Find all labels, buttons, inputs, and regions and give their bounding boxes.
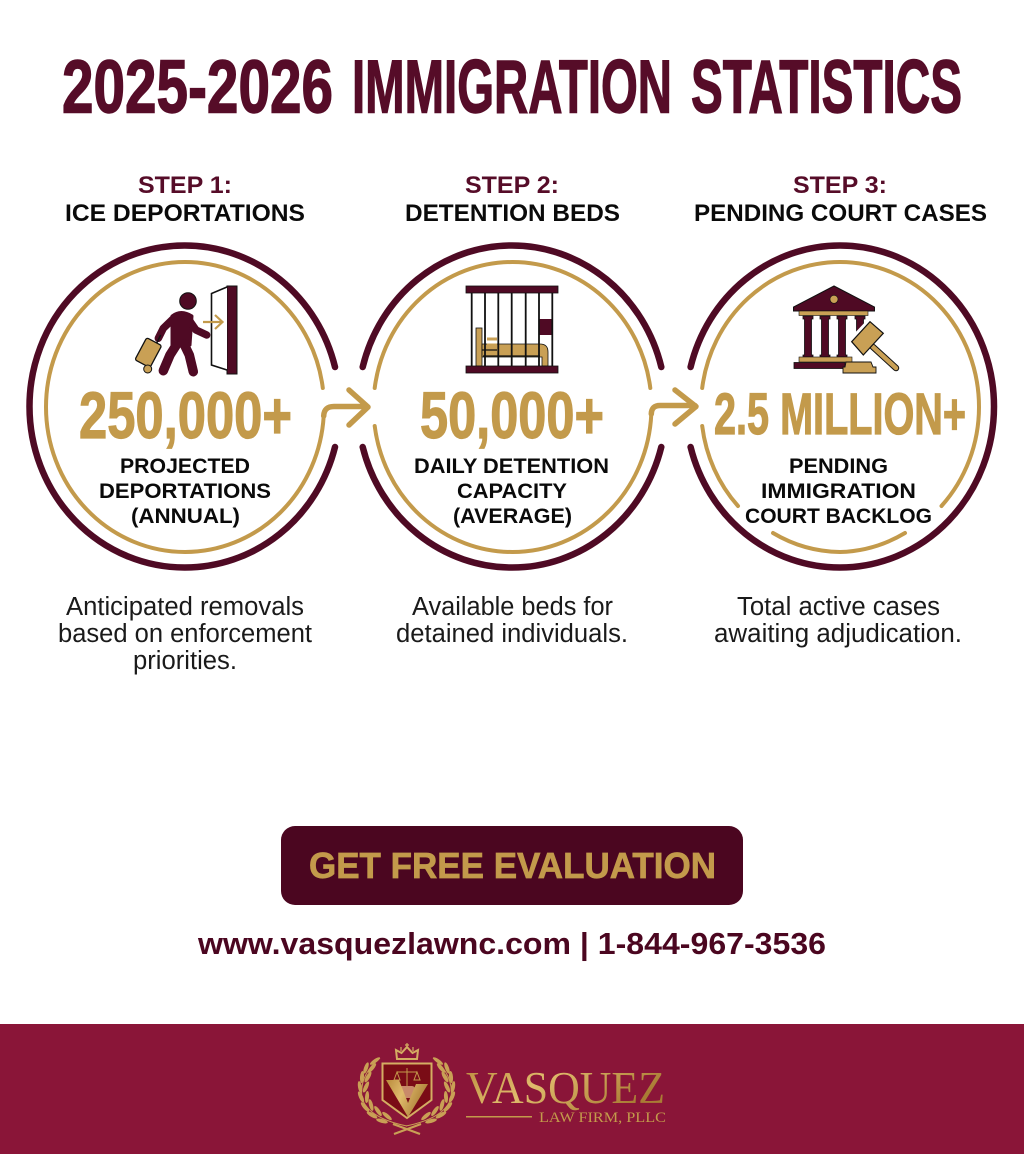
panel: circle 2 detention bbox=[363, 246, 661, 568]
label: pending immigration court backlog: PENDING bbox=[789, 455, 888, 478]
label: projected deportations: (ANNUAL) bbox=[131, 505, 240, 528]
footer band bbox=[0, 1024, 1024, 1154]
arrow: step 2 to step 3 bbox=[651, 390, 696, 424]
label: daily detention capacity: DAILY DETENTION bbox=[414, 455, 609, 478]
description: step 2 bbox=[396, 593, 628, 648]
description: step 1: priorities. bbox=[133, 647, 237, 675]
outer ring 3 bbox=[691, 245, 994, 568]
heading: step 3: STEP 3: bbox=[793, 172, 887, 199]
description: step 3: awaiting adjudication. bbox=[714, 620, 962, 648]
heading: step 3 bbox=[694, 172, 987, 227]
arrow: step 1 to step 2 bbox=[324, 390, 368, 425]
label: daily detention capacity: (AVERAGE) bbox=[453, 505, 572, 528]
button: get free evaluation: GET FREE EVALUATION bbox=[309, 845, 716, 886]
heading: step 2: STEP 2: bbox=[465, 172, 559, 199]
inner ring 3 bbox=[702, 262, 979, 552]
heading: step 1: STEP 1: bbox=[138, 172, 232, 199]
heading: step 2 bbox=[405, 172, 620, 227]
wreath left bbox=[357, 1056, 407, 1126]
icon: courthouse and gavel bbox=[794, 286, 896, 373]
description: step 3 bbox=[714, 593, 962, 648]
panel: circle 3 court backlog bbox=[691, 245, 994, 568]
title: 2025-2026 bbox=[62, 44, 333, 128]
description: step 2: detained individuals. bbox=[396, 620, 628, 648]
description: step 1: Anticipated removals bbox=[66, 593, 304, 621]
label: projected deportations: DEPORTATIONS bbox=[99, 480, 271, 503]
stat: 50,000+: 50,000+ bbox=[420, 378, 604, 452]
inner ring 1 bbox=[46, 262, 324, 552]
logo emblem bbox=[357, 1043, 456, 1134]
title bbox=[62, 44, 962, 128]
description: step 1: based on enforcement bbox=[58, 620, 312, 648]
wreath right bbox=[406, 1056, 456, 1126]
description: step 3: Total active cases bbox=[737, 593, 940, 621]
heading: step 1 bbox=[65, 172, 305, 227]
label: projected deportations bbox=[99, 455, 271, 528]
label: pending immigration court backlog: IMMIGRATION bbox=[761, 480, 916, 503]
description: step 2: Available beds for bbox=[412, 593, 613, 621]
icon: person leaving through door bbox=[135, 286, 237, 374]
logo subtitle: LAW FIRM, PLLC bbox=[539, 1110, 666, 1126]
heading: step 3: PENDING COURT CASES bbox=[694, 200, 987, 227]
button: get free evaluation bbox=[281, 826, 743, 905]
inner ring 2 bbox=[375, 262, 651, 552]
outer ring 1 bbox=[30, 245, 335, 568]
heading: step 1: ICE DEPORTATIONS bbox=[65, 200, 305, 227]
stat: 250,000+: 250,000+ bbox=[79, 378, 292, 452]
label: projected deportations: PROJECTED bbox=[120, 455, 250, 478]
description: step 1 bbox=[58, 593, 312, 675]
panel: circle 1 deportations bbox=[30, 245, 335, 568]
heading: step 2: DETENTION BEDS bbox=[405, 200, 620, 227]
contact line: www.vasquezlawnc.com | 1-844-967-3536 bbox=[197, 926, 826, 961]
outer ring 2 bbox=[363, 246, 661, 568]
label: daily detention capacity: CAPACITY bbox=[457, 480, 567, 503]
label: daily detention capacity bbox=[414, 455, 609, 528]
logo wordmark: VASQUEZ bbox=[466, 1062, 665, 1113]
logo: vasquez law firm bbox=[357, 1043, 666, 1134]
label: pending immigration court backlog: COURT BACKLOG bbox=[745, 505, 932, 528]
label: pending immigration court backlog bbox=[745, 455, 932, 528]
icon: jail cell with bed bbox=[466, 286, 558, 373]
title: IMMIGRATION bbox=[352, 44, 672, 128]
